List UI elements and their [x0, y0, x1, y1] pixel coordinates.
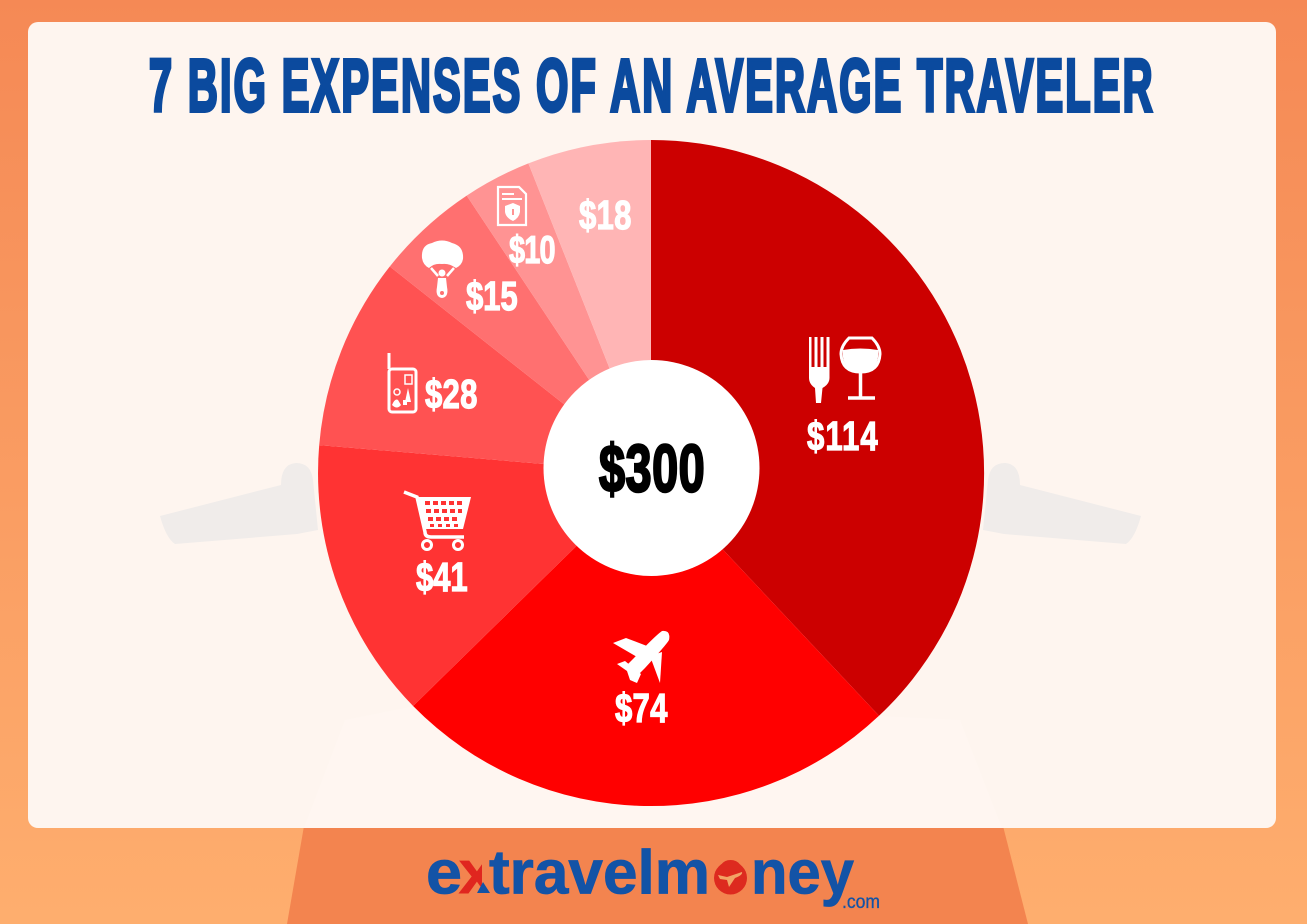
slice: shopping $41 — [318, 445, 651, 706]
icon: airplane — [613, 631, 669, 683]
logo suffix .com: .com — [842, 892, 880, 913]
title: 7 BIG EXPENSES OF AN AVERAGE TRAVELER — [149, 44, 1153, 127]
logo letter o with plane: o — [716, 838, 745, 908]
logo: extravelmoney.com — [428, 848, 879, 908]
icon: parachute — [422, 240, 463, 298]
value: $74: $74 — [615, 685, 668, 731]
icon: souvenir machine — [389, 353, 416, 412]
slice: other $18 — [528, 140, 651, 473]
icon: insurance document — [498, 187, 526, 225]
slice: insurance $10 — [467, 163, 651, 473]
right plane wing — [983, 463, 1141, 544]
total value: $300 — [599, 432, 705, 507]
left plane wing — [160, 463, 318, 544]
cart grid holes — [425, 501, 462, 527]
slice: food $114 — [651, 140, 984, 716]
icon: wine glass — [841, 338, 880, 398]
slice: souvenirs $28 — [319, 266, 651, 473]
donut chart — [318, 140, 984, 806]
value: $41: $41 — [416, 554, 468, 600]
logo letter x: x — [458, 838, 497, 908]
logo letters travelm: travelm — [489, 838, 710, 908]
logo letter e: e — [426, 838, 462, 908]
icon: shopping cart — [404, 492, 471, 550]
icon: fork — [809, 337, 830, 403]
centre hole — [544, 360, 760, 576]
logo base trapezoid — [287, 826, 1028, 924]
slice: flights $74 — [413, 473, 879, 806]
value: $18: $18 — [579, 192, 631, 238]
logo letter x — [458, 860, 490, 894]
value: $114: $114 — [807, 413, 878, 459]
value: $28: $28 — [425, 371, 477, 417]
value: $15: $15 — [466, 273, 518, 319]
logo letters ney: ney — [751, 838, 854, 908]
plane fuselage shadow — [304, 706, 1002, 828]
slice: activities $15 — [390, 196, 651, 473]
value: $10: $10 — [509, 229, 556, 272]
